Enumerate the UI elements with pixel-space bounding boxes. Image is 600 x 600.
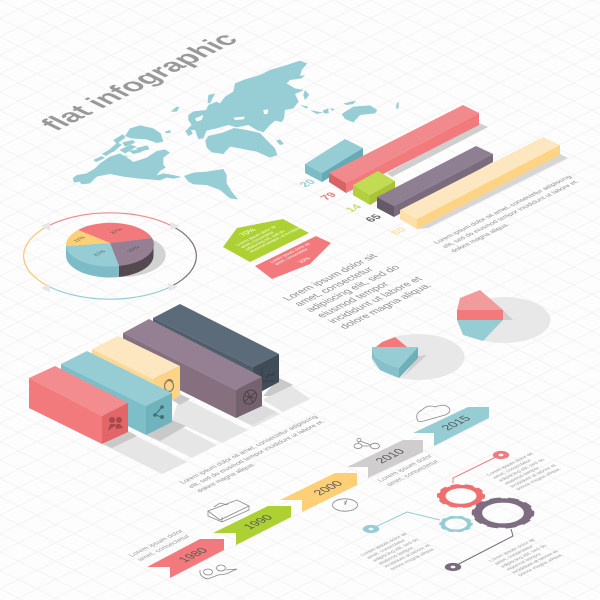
slice: purple 20% [110, 238, 154, 266]
text: central paragraph: amet, consectetur [292, 266, 377, 308]
wedge shadow [403, 355, 427, 377]
text: teal gear note: Lorem ipsum dolor sit [359, 532, 410, 557]
arrow: 1990: 1990 [240, 513, 276, 531]
callout text: green: Lorem ipsum dolor sit [234, 225, 278, 246]
slice: yellow 11% [66, 230, 110, 246]
wedge shadow [503, 310, 513, 320]
bar: green 14 [353, 171, 395, 205]
map: Africa [205, 128, 277, 158]
map: inland seas [195, 109, 268, 122]
text: purple gear note: amet, consectetur [493, 545, 536, 566]
label: 37%: 37% [109, 228, 125, 235]
connector: purple [453, 529, 513, 567]
map: South America [184, 169, 238, 199]
text: teal gear note: amet, consectetur [365, 539, 408, 560]
pie chart with ring [24, 213, 196, 299]
text: bar chart caption: elit, sed do eiusmod tempor incididunt ut labore et. [441, 179, 581, 249]
map: Eurasia [187, 61, 307, 139]
node: purple [441, 561, 465, 573]
node: teal [359, 523, 383, 535]
arrow: 1990 [213, 506, 291, 545]
text: 3D bar caption: elit, sed do eiusmod tempor incididunt ut labore et. [187, 419, 327, 489]
world map [73, 61, 399, 199]
slice top: red [457, 290, 503, 310]
arrow: 2000 [280, 473, 357, 512]
icon: people outline [200, 565, 237, 579]
map: small islands [165, 90, 399, 145]
pie base [458, 297, 550, 343]
bar: teal 20 [305, 139, 363, 182]
arrow: 2015 [413, 407, 489, 446]
arrow: 2000: 2000 [310, 479, 346, 497]
callout text: red: amet, consectetur [273, 247, 310, 266]
icon: briefcase [208, 500, 249, 522]
callout text: green: amet, consectetur [239, 230, 276, 249]
map: North America [73, 149, 182, 184]
value: 79: 79 [318, 191, 340, 202]
text: 1980 note: amet, consectetur [136, 534, 193, 562]
slice side: teal [372, 347, 399, 378]
timeline [128, 405, 489, 579]
text: bar chart caption: Lorem ipsum dolor sit amet, consectetur adipiscing [433, 175, 574, 245]
connector: red [453, 455, 500, 483]
icon: lock [164, 379, 174, 392]
ring: teal arc [48, 286, 172, 299]
text: red gear note: dolore magna aliqua. [515, 467, 563, 491]
text: purple gear note: Lorem ipsum dolor sit [487, 538, 538, 563]
exploded pie: upper right [457, 290, 550, 343]
map: arctic islands [93, 134, 149, 162]
text: purple gear note: eiusmod tempor [505, 552, 544, 572]
text: red gear note: incididunt ut labore et [509, 464, 559, 488]
pie side: dark [119, 245, 154, 277]
3D bar chart: shadows [102, 378, 310, 474]
map: Australia [342, 105, 377, 122]
text: red gear note: eiusmod tempor [503, 466, 542, 486]
pie side: teal [66, 245, 119, 278]
value: 20: 20 [297, 178, 319, 189]
text: central paragraph: eiusmod tempor [315, 281, 393, 319]
gears diagram [359, 449, 567, 577]
callout text: green: adipiscing elit, sed do [243, 229, 287, 251]
text: purple gear note: adipiscing elit, sed do [499, 544, 549, 569]
value: 65: 65 [363, 213, 385, 224]
text: red gear note: amet, consectetur [491, 459, 534, 480]
pie shadow [78, 233, 166, 277]
top-right bar chart [297, 105, 568, 237]
icon: cloud [417, 405, 450, 422]
arrow: 1980: 1980 [175, 546, 211, 564]
text: purple gear note: incididunt ut labore et [511, 550, 561, 574]
icon: clock [332, 499, 358, 511]
callout text: green: eiusmod tempor, ut incididunt [248, 225, 305, 253]
slice: teal [457, 320, 503, 341]
gear: red [430, 480, 492, 512]
label: 11%: 11% [72, 236, 87, 243]
ring: red arc [48, 213, 172, 226]
text: purple gear note: dolore magna aliqua. [517, 553, 565, 577]
slice: red 37% [78, 223, 152, 243]
text: 3D bar caption: dolore magna aliqua. [196, 462, 258, 493]
label: 21%: 21% [92, 250, 108, 257]
title: flat infographic [34, 29, 246, 135]
value: 80: 80 [388, 226, 410, 237]
3D bar: yellow [92, 336, 180, 409]
ring: yellow arc [24, 226, 48, 286]
slice top: teal [372, 347, 418, 368]
connector: teal [371, 512, 440, 529]
callout: red 30% [255, 236, 331, 279]
text: 2010 note: amet, consectetur [385, 459, 442, 487]
slice: red [376, 337, 407, 347]
slice: teal 21% [66, 243, 119, 267]
text: teal gear note: incididunt ut labore et [383, 544, 433, 568]
arrow: 2010 [347, 440, 423, 478]
bar: purple 65 [377, 146, 493, 217]
callout text: red: Lorem ipsum dolor sit [268, 242, 312, 263]
node: red [489, 449, 513, 461]
value: 14: 14 [343, 203, 366, 214]
map: Greenland [125, 125, 163, 143]
3D bar: red [29, 366, 128, 444]
arrow: 2010: 2010 [372, 447, 408, 465]
ring: purple arc [172, 226, 196, 286]
bar: red 79 [329, 105, 479, 193]
icon: share [154, 406, 164, 418]
icon: chart [262, 368, 275, 381]
text: red gear note: Lorem ipsum dolor sit [485, 452, 536, 477]
bar: yellow 80 [400, 137, 560, 229]
3D bar: purple [123, 319, 262, 418]
icon: network [354, 438, 380, 449]
text: bar chart caption: dolore magna aliqua. [450, 222, 512, 253]
pie base [372, 334, 464, 380]
bar shadow: yellow [417, 154, 568, 229]
callout value: 30%: 30% [297, 257, 313, 264]
3D bar: teal [61, 351, 172, 435]
text: central paragraph: adipiscing elit, sed do [304, 264, 403, 314]
slice side: dark teal [399, 347, 418, 378]
3D bar: dark slate [153, 304, 279, 396]
arrow: 1980 [147, 539, 224, 578]
gear: purple [462, 493, 544, 533]
text: 1980 note: Lorem ipsum dolor [128, 529, 186, 558]
text: teal gear note: dolore magna aliqua. [389, 547, 437, 571]
label: 20%: 20% [126, 246, 142, 253]
arrow: 2015: 2015 [438, 414, 474, 432]
text: red gear note: adipiscing elit, sed do [497, 458, 547, 483]
text: teal gear note: adipiscing elit, sed do [371, 538, 421, 563]
text: central paragraph: dolore magna aliqua. [338, 282, 435, 331]
callout: green 70% [223, 218, 309, 262]
text: central paragraph: Lorem ipsum dolor sit [281, 253, 381, 302]
text: 2010 note: Lorem ipsum dolor [377, 454, 435, 483]
callout value: 70%: 70% [237, 227, 258, 238]
text: 3D bar caption: Lorem ipsum dolor sit amet, consectetur adipiscing [179, 415, 320, 485]
text: central paragraph: incididunt ut labore et [326, 276, 425, 325]
text: teal gear note: eiusmod tempor [377, 546, 416, 566]
gear: teal [435, 513, 477, 535]
icon: people [108, 417, 123, 431]
bar shadow: red [387, 123, 488, 177]
slice side: red [457, 310, 503, 320]
icon: globe [241, 387, 259, 407]
ring markers [41, 222, 180, 292]
exploded pie: lower [372, 334, 464, 380]
